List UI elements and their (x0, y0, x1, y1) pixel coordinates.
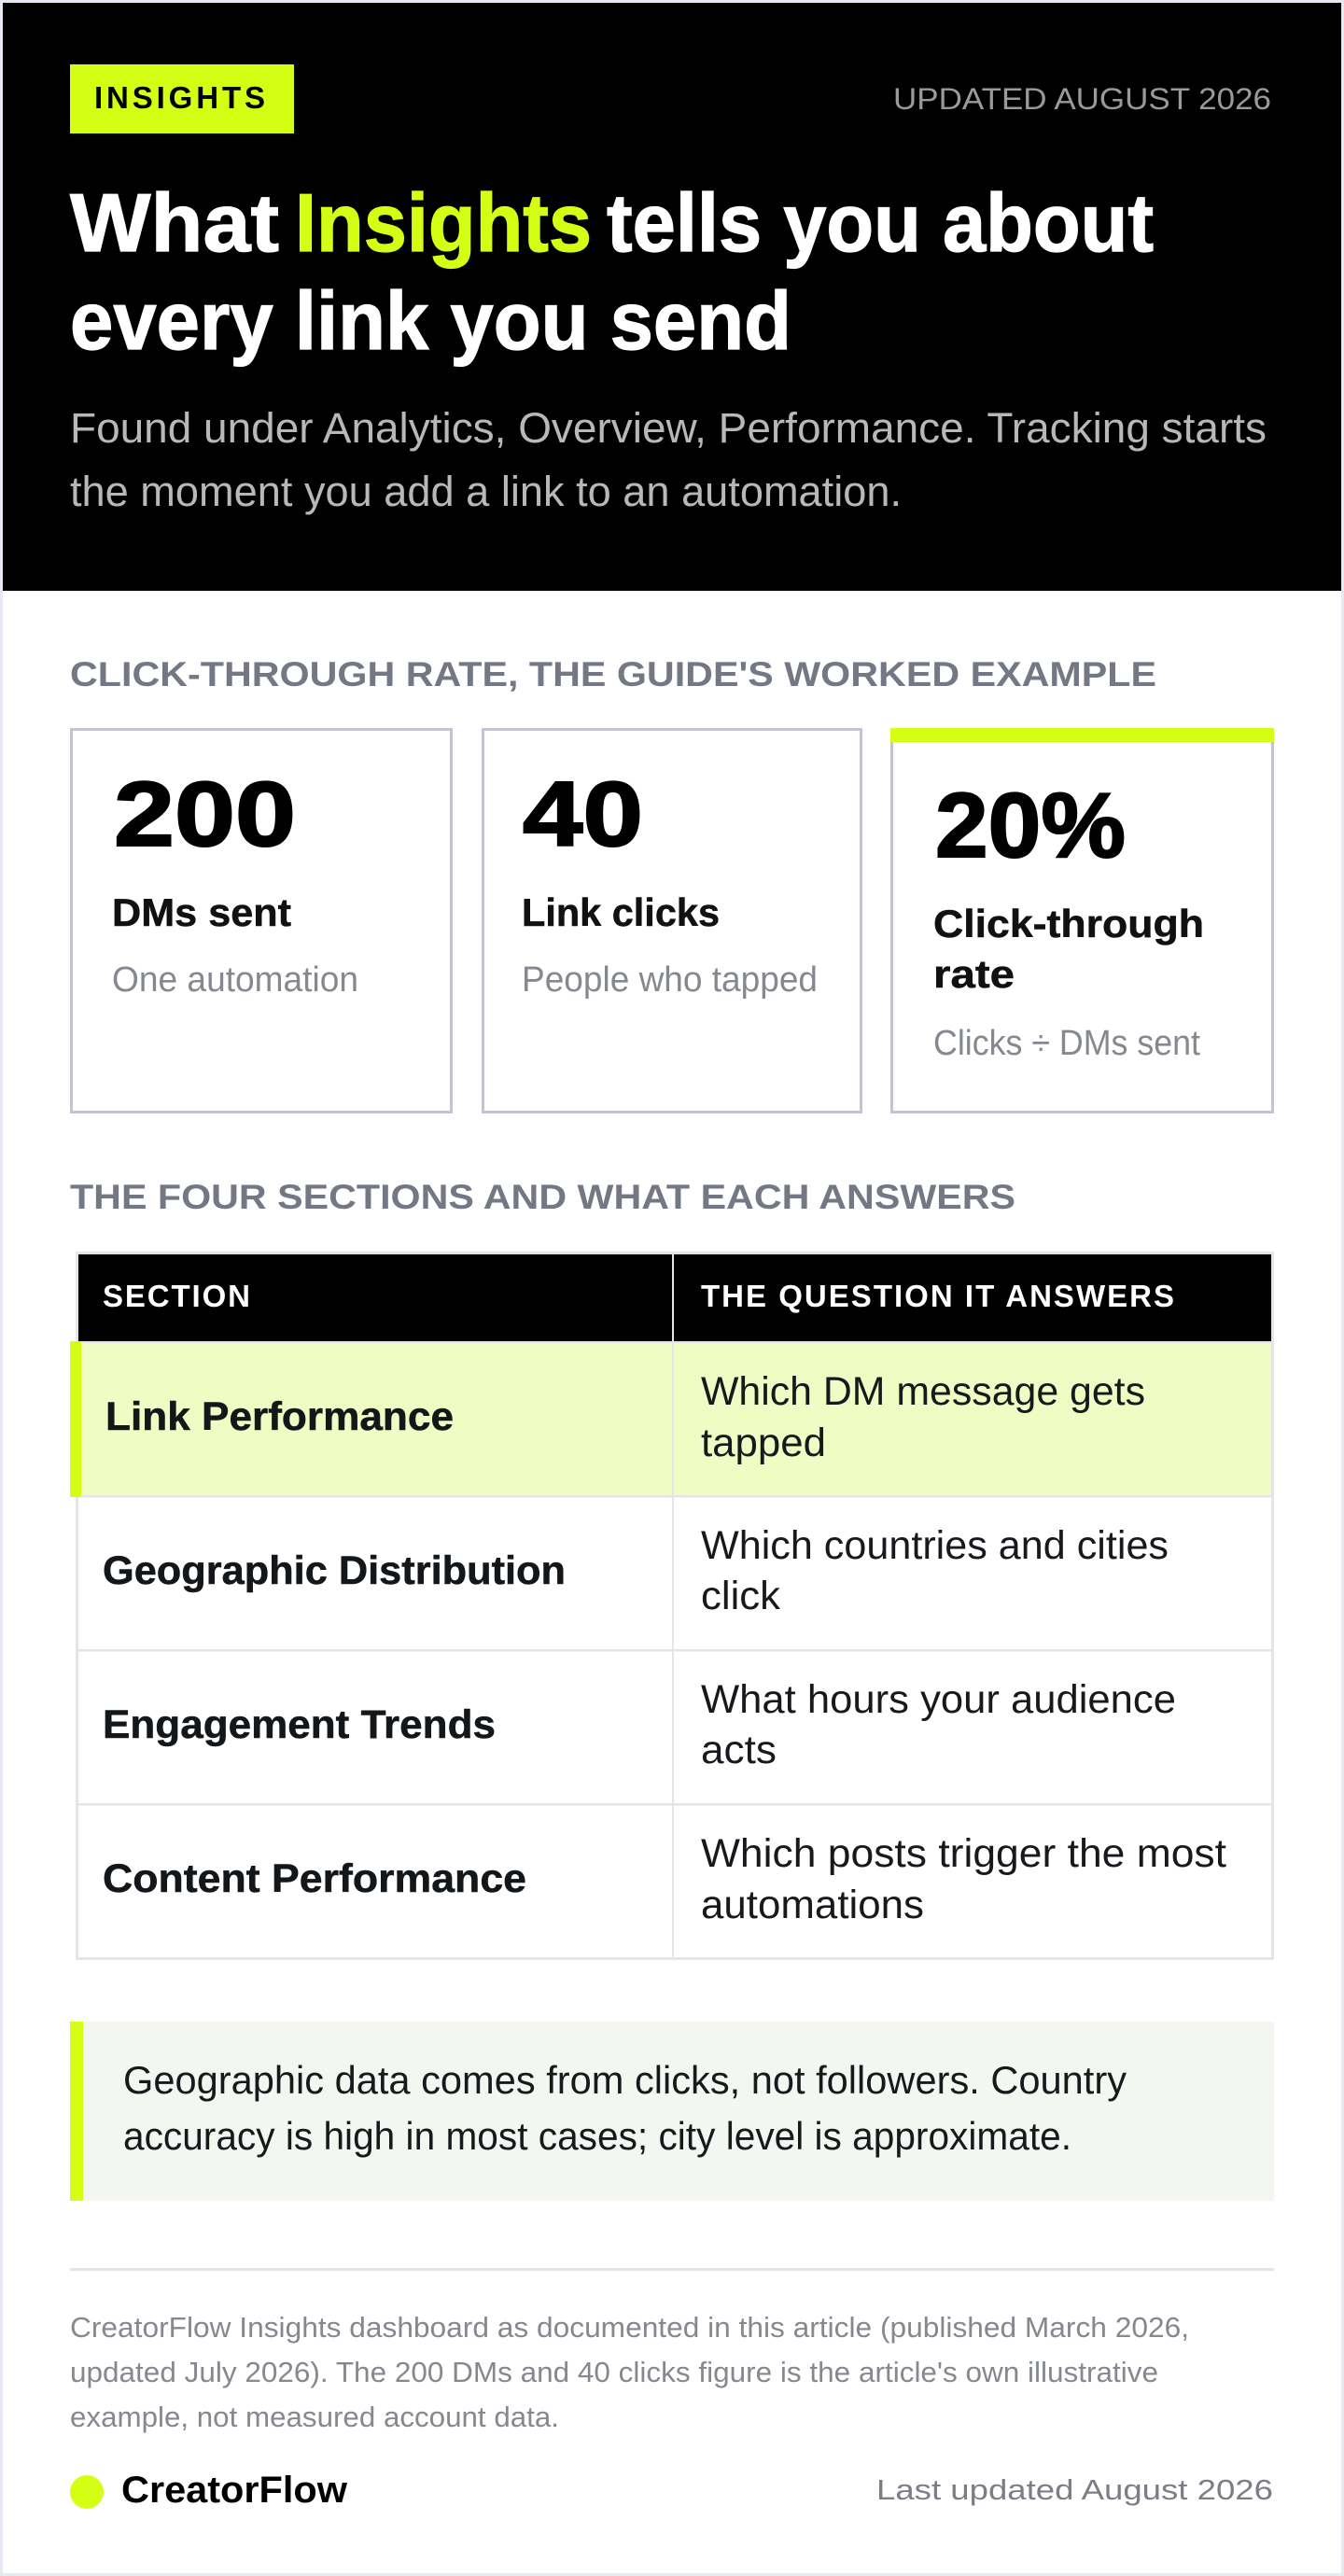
card: link clicks: 40 (523, 763, 643, 865)
row: engagement trends: What hours your audience (701, 1677, 1176, 1722)
heading: click-through rate: CLICK-THROUGH RATE, THE GUIDE'S WORKED EXAMPLE (70, 655, 1156, 693)
row: geographic distribution: Which countries and cities (701, 1523, 1169, 1568)
row: content performance (78, 1805, 1271, 1957)
badge: insights (70, 64, 294, 133)
row: geographic distribution (78, 1497, 1271, 1649)
footnote: CreatorFlow Insights dashboard as documented in this article (published March 2026, (70, 2311, 1189, 2344)
row: geographic distribution: click (701, 1574, 781, 1618)
card: DMs sent: DMs sent (112, 890, 291, 934)
row: link performance (70, 1341, 1271, 1497)
card: DMs sent (71, 730, 452, 1113)
table header row: THE QUESTION IT ANSWERS (701, 1279, 1174, 1313)
callout: geographic data: Geographic data comes from clicks, not followers. Country (123, 2058, 1127, 2102)
subtitle: Found under Analytics, Overview, Performance. Tracking starts (70, 404, 1267, 452)
row: engagement trends: Engagement Trends (103, 1702, 496, 1747)
card: link clicks: People who tapped (522, 960, 818, 1000)
table: sections and questions (70, 1252, 1274, 1960)
card: link clicks: Link clicks (522, 890, 720, 934)
row: content performance: Content Performance (103, 1856, 526, 1901)
row: engagement trends (78, 1652, 1271, 1803)
subtitle: the moment you add a link to an automation. (70, 468, 902, 515)
title: Insights (295, 176, 592, 269)
card: link clicks (483, 730, 861, 1113)
icon: brand dot (70, 2475, 104, 2509)
card: click-through rate: Clicks ÷ DMs sent (933, 1024, 1200, 1063)
row: link performance: tapped (701, 1421, 826, 1465)
table header row (78, 1254, 1271, 1341)
row: link performance: Which DM message gets (701, 1369, 1145, 1414)
row: engagement trends: acts (701, 1728, 777, 1772)
title: every link you send (70, 274, 791, 367)
heading: four sections: THE FOUR SECTIONS AND WHAT EACH ANSWERS (70, 1178, 1015, 1216)
brand: CreatorFlow: CreatorFlow (121, 2470, 348, 2511)
card: DMs sent: One automation (112, 960, 358, 1000)
subtitle (70, 404, 1267, 515)
footnote: example, not measured account data. (70, 2401, 559, 2433)
row: content performance: automations (701, 1883, 924, 1927)
card: click-through rate (890, 728, 1274, 1113)
callout: geographic data (70, 2022, 1274, 2201)
card: DMs sent: 200 (114, 763, 296, 865)
panel: header (3, 3, 1341, 591)
badge: insights: INSIGHTS (94, 80, 265, 115)
row: content performance: Which posts trigger the most (701, 1831, 1226, 1876)
card: click-through rate: 20% (935, 774, 1126, 876)
footnote: updated July 2026). The 200 DMs and 40 clicks figure is the article's own illustrative (70, 2356, 1158, 2388)
row: geographic distribution: Geographic Distribution (103, 1548, 566, 1593)
footnote (70, 2311, 1189, 2433)
title: tells you about (607, 176, 1154, 269)
card: click-through rate: rate (933, 952, 1015, 996)
callout: geographic data: accuracy is high in most cases; city level is approximate. (123, 2114, 1071, 2158)
updated date: UPDATED AUGUST 2026 (893, 82, 1271, 116)
title (70, 176, 1154, 367)
table header row: SECTION (103, 1279, 250, 1313)
title: What (70, 176, 279, 269)
row: link performance: Link Performance (105, 1394, 454, 1439)
card: click-through rate: Click-through (933, 902, 1204, 945)
last updated: Last updated August 2026 (876, 2473, 1273, 2506)
